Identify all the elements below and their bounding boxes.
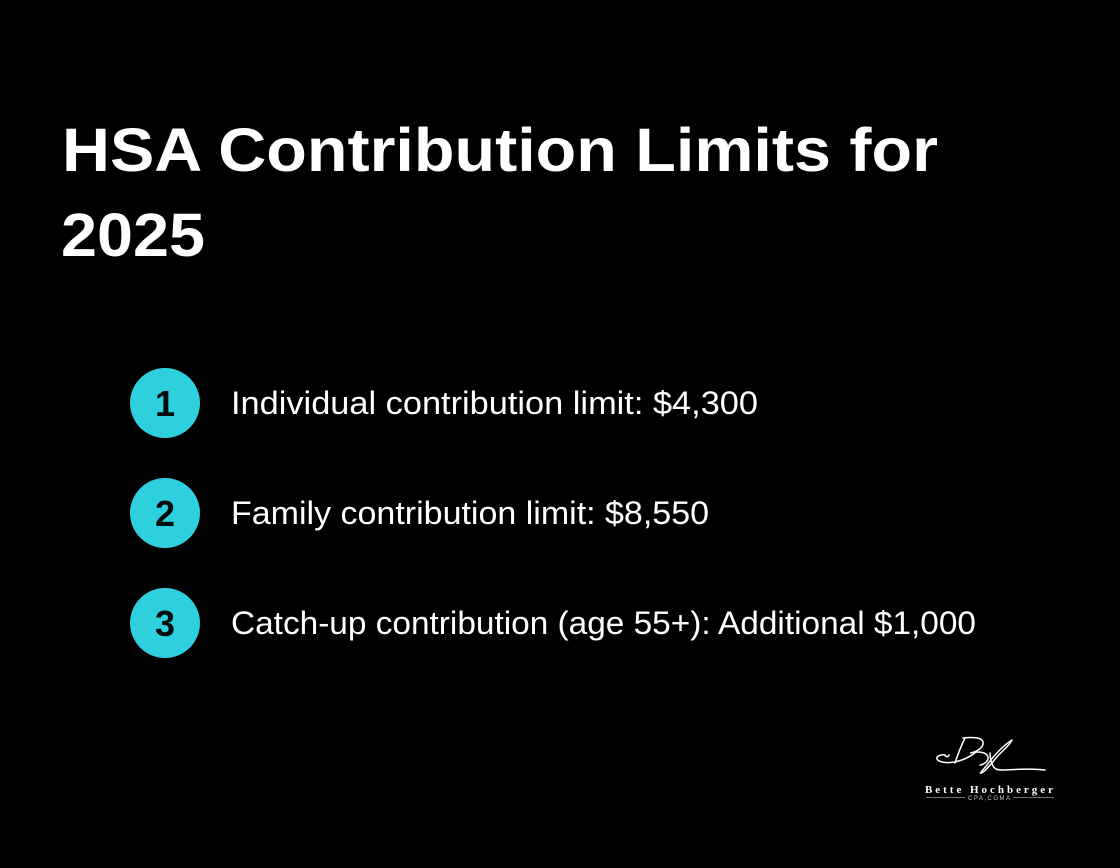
logo credentials: CPA,CGMA [968,796,1010,802]
number badge 2: 2 [155,493,175,534]
logo: Bette Hochberger signature [925,737,1055,802]
logo rules [926,796,1054,798]
list item 3 [130,588,976,658]
item 3 text: Catch-up contribution (age 55+): Additional $1,000 [231,605,976,641]
icon: BH signature monogram [937,737,1045,773]
title: 2025 [61,201,205,269]
title: HSA Contribution Limits for [62,116,938,184]
item 2 text: Family contribution limit: $8,550 [231,495,709,531]
title [61,116,938,269]
item 1 text: Individual contribution limit: $4,300 [231,385,758,421]
number badge 2 [130,478,200,548]
number badge 3 [130,588,200,658]
list item 2 [130,478,709,548]
number badge 3: 3 [155,603,175,644]
logo name: Bette Hochberger [925,784,1055,796]
number badge 1 [130,368,200,438]
number badge 1: 1 [155,383,175,424]
list item 1 [130,368,758,438]
